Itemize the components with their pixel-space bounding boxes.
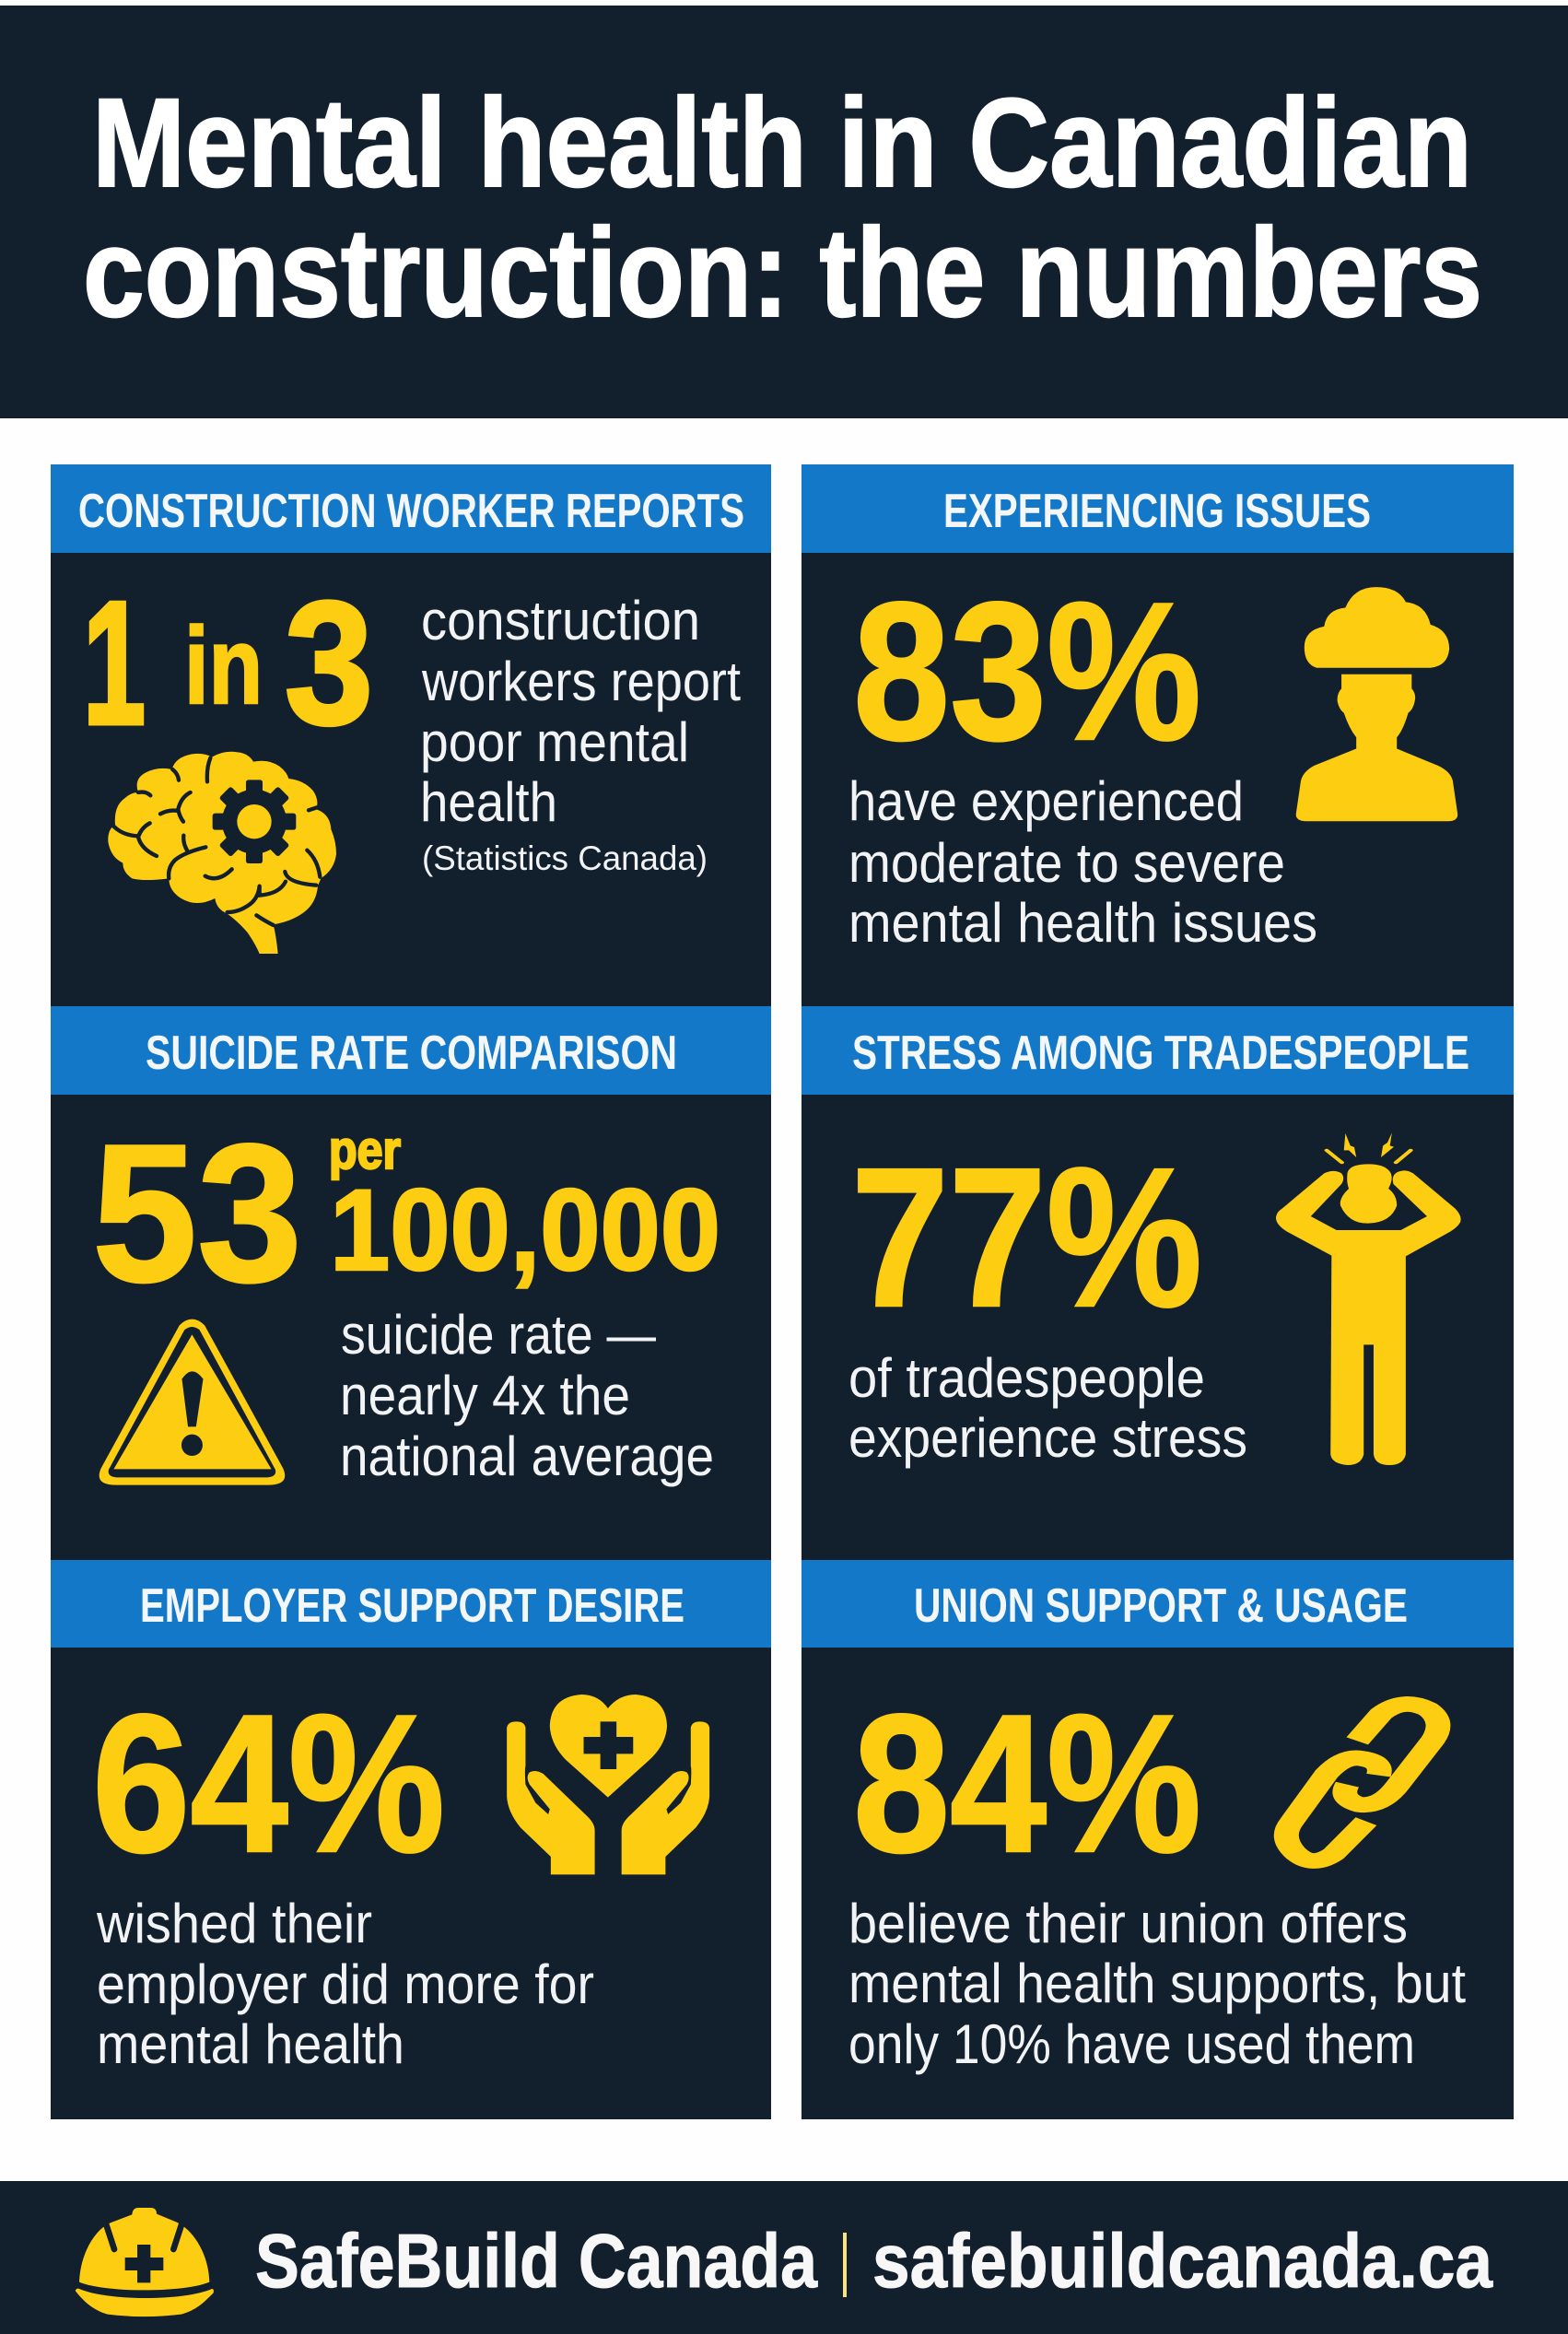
description text [340,1304,714,1487]
panel heading: EXPERIENCING ISSUES [943,485,1371,538]
title [83,73,1482,344]
description text: national average [340,1425,714,1487]
panel: union support and usage [802,1560,1514,2119]
big stat: 77%: 77% [851,1126,1202,1348]
big stat: 53 per 100,000 [92,1104,720,1323]
footer banner [0,2181,1568,2334]
description text: have experienced [848,770,1244,832]
description text: mental health supports, but [848,1953,1466,2014]
description text: mental health issues [848,892,1317,954]
panel heading: UNION SUPPORT & USAGE [914,1579,1408,1633]
description text: moderate to severe [848,832,1285,894]
description text [96,1893,594,2075]
panel: construction worker reports [51,464,771,1006]
description text: suicide rate — [341,1304,656,1366]
brand name: SafeBuild Canada [255,2218,818,2304]
icon: chain link [1286,1704,1438,1861]
description text [420,590,741,877]
panel: employer support desire [51,1560,771,2119]
big stat: 53 per 100,000: per [329,1120,401,1180]
panel heading: SUICIDE RATE COMPARISON [146,1026,677,1080]
description text: mental health [97,2013,404,2075]
header banner [0,6,1568,418]
panel heading: CONSTRUCTION WORKER REPORTS [78,485,744,538]
icon: hard hat with cross [76,2208,214,2316]
description text: health [420,771,557,833]
description text: believe their union offers [848,1893,1408,1954]
big stat: 64%: 64% [92,1674,445,1894]
description text: workers report [421,651,741,712]
big stat: 84%: 84% [853,1674,1201,1894]
big stat: 83%: 83% [853,562,1201,781]
panel: suicide rate comparison [51,1006,771,1560]
panel: stress among tradespeople [802,1006,1514,1560]
icon: hands holding heart [507,1695,709,1874]
description text: nearly 4x the [340,1365,630,1426]
description text: poor mental [420,711,689,773]
description text: employer did more for [97,1953,594,2015]
description text [848,770,1317,954]
description text: construction [421,590,700,651]
description text: experience stress [848,1407,1247,1469]
icon: brain with gear [108,752,336,954]
description text [848,1893,1466,2075]
description text: only 10% have used them [848,2013,1415,2075]
big stat: 1 in 3: in [184,605,263,727]
description text [848,1347,1247,1469]
panel heading: EMPLOYER SUPPORT DESIRE [140,1579,685,1633]
icon: stressed figure holding head [1276,1132,1461,1465]
big stat: 1 in 3 [83,566,373,761]
description text: (Statistics Canada) [422,839,708,877]
big stat: 53 per 100,000: 100,000 [330,1167,720,1295]
description text: wished their [96,1893,372,1954]
website: safebuildcanada.ca [872,2218,1493,2304]
divider [843,2233,847,2297]
big stat: 1 in 3: 1 [83,566,146,761]
icon: warning triangle [99,1319,285,1485]
icon: worker with cloud over head [1296,587,1457,821]
big stat: 1 in 3: 3 [285,566,373,761]
big stat: 53 per 100,000: 53 [92,1104,302,1323]
panel: experiencing issues [802,464,1514,1006]
description text: of tradespeople [848,1347,1205,1409]
